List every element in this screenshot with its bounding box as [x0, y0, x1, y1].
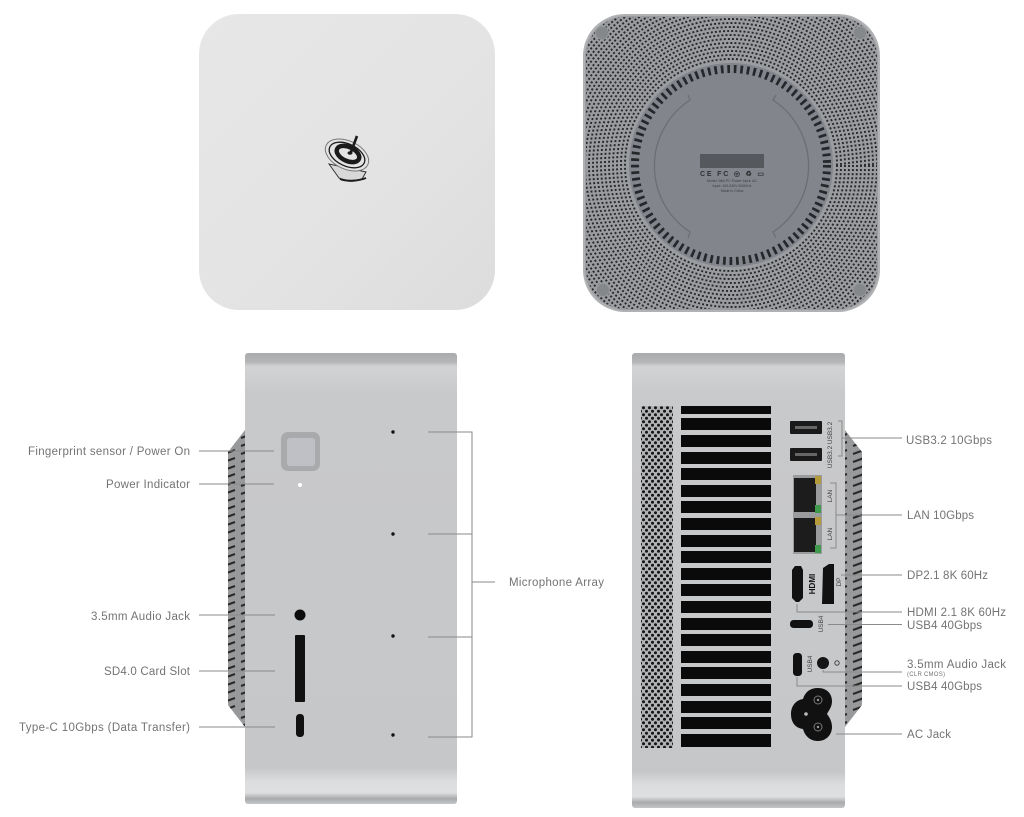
- regulatory label: [700, 154, 764, 193]
- lower USB4 port: [793, 653, 814, 676]
- front view labels: Fingerprint sensor / Power On: [28, 446, 190, 458]
- icon: CLR CMOS: [835, 661, 839, 665]
- front view labels: Microphone Array: [509, 577, 604, 589]
- rear view labels: USB4 40Gbps: [907, 620, 982, 632]
- side vent: [228, 430, 245, 727]
- LAN ports: LAN: [827, 527, 834, 540]
- upper USB4 port: [790, 615, 825, 632]
- audio jack: [294, 610, 306, 620]
- rear view labels: 3.5mm Audio Jack: [907, 659, 1006, 671]
- Type-C port: [296, 714, 304, 737]
- rear view device: [632, 353, 862, 808]
- front view labels: SD4.0 Card Slot: [104, 666, 191, 678]
- rear view labels: [797, 421, 1006, 741]
- perforated grille: [641, 406, 673, 748]
- USB 3.2 ports: [790, 421, 834, 468]
- perforated speaker mesh: [586, 17, 877, 309]
- front view labels: Type-C 10Gbps (Data Transfer): [19, 722, 190, 734]
- fingerprint sensor: [281, 432, 320, 471]
- front view labels: Power Indicator: [106, 479, 190, 491]
- front view labels: 3.5mm Audio Jack: [91, 611, 190, 623]
- LAN ports: LAN: [827, 489, 834, 502]
- SD card slot: [295, 635, 305, 702]
- DP port: DP: [836, 577, 843, 587]
- upper USB4 port: USB4: [818, 615, 825, 632]
- rear view labels: LAN 10Gbps: [907, 510, 974, 522]
- side vent: [845, 430, 862, 727]
- power indicator: [298, 483, 302, 487]
- LAN ports: [793, 475, 834, 554]
- HDMI port: [792, 566, 817, 602]
- icon: spinning top logo: [320, 133, 374, 181]
- rear view labels: AC Jack: [907, 729, 951, 741]
- exhaust slots: [681, 406, 771, 747]
- rear view labels: DP2.1 8K 60Hz: [907, 570, 988, 582]
- front view device: [228, 353, 457, 804]
- regulatory label: Input: 100-240V 50/60Hz: [713, 184, 752, 188]
- rear view labels: HDMI 2.1 8K 60Hz: [907, 607, 1006, 619]
- rear view labels: USB4 40Gbps: [907, 681, 982, 693]
- rear view labels: (CLR CMOS): [907, 672, 945, 678]
- microphone bracket: [428, 432, 495, 737]
- microphone holes: [391, 430, 395, 737]
- lower USB4 port: USB4: [807, 655, 814, 672]
- USB 3.2 ports: USB3.2: [827, 445, 834, 468]
- regulatory label: Model: Mini PC Power Input: AC: [707, 179, 757, 183]
- top view panel: [199, 14, 495, 310]
- HDMI port: HDMI: [808, 574, 817, 594]
- DP port: [822, 564, 843, 604]
- USB 3.2 ports: USB3.2: [827, 421, 834, 444]
- rear view labels: USB3.2 10Gbps: [906, 435, 992, 447]
- central vent ring and disc: [629, 63, 833, 267]
- bottom view panel: [583, 14, 880, 312]
- rubber feet: [596, 26, 866, 296]
- audio jack: [817, 657, 829, 669]
- regulatory label: Made in China: [721, 189, 743, 193]
- regulatory label: CE FC ◎ ♻ ▭: [700, 170, 764, 178]
- AC inlet: [791, 688, 832, 741]
- front view labels: [19, 432, 604, 737]
